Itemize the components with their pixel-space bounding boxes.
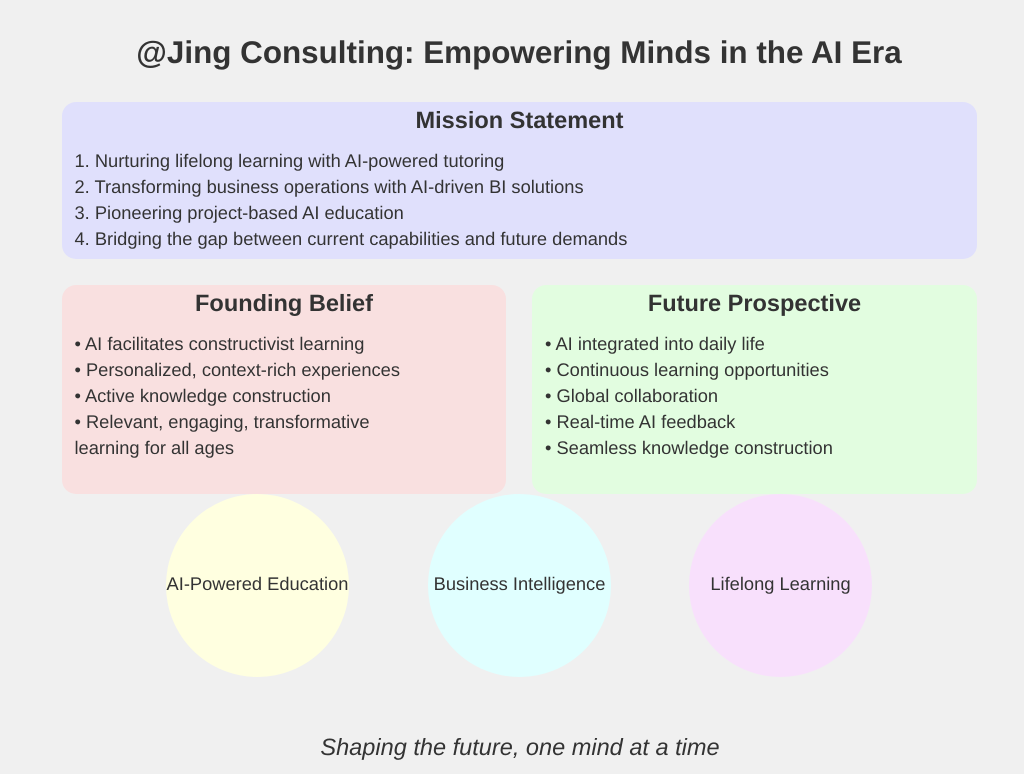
text: future prospective list: • AI integrated into daily life — [545, 333, 765, 354]
text: founding belief list: learning for all ages — [74, 437, 234, 458]
circle: business intelligence: Business Intelligence — [434, 573, 605, 594]
text: mission list: 4. Bridging the gap between current capabilities and future demands — [74, 228, 627, 249]
heading: future prospective: Future Prospective — [648, 290, 861, 316]
panel: founding belief — [62, 285, 506, 494]
heading: mission statement: Mission Statement — [415, 107, 624, 133]
text: founding belief list: • Personalized, context-rich experiences — [74, 359, 400, 380]
title: @Jing Consulting: Empowering Minds in the AI Era — [136, 35, 902, 70]
panel: future prospective — [532, 285, 977, 494]
circle: lifelong learning: Lifelong Learning — [710, 573, 851, 594]
text: mission list — [74, 150, 627, 249]
text: mission list: 2. Transforming business operations with AI-driven BI solutions — [74, 176, 584, 197]
text: future prospective list: • Real-time AI feedback — [545, 411, 735, 432]
text: founding belief list: • Relevant, engaging, transformative — [74, 411, 370, 432]
circle: lifelong learning — [689, 494, 872, 677]
text: mission list: 1. Nurturing lifelong learning with AI-powered tutoring — [74, 150, 504, 171]
text: future prospective list — [545, 333, 833, 458]
text: founding belief list — [74, 333, 400, 458]
heading: founding belief: Founding Belief — [195, 290, 373, 316]
text: future prospective list: • Seamless knowledge construction — [545, 437, 833, 458]
text: founding belief list: • Active knowledge construction — [74, 385, 331, 406]
panel: mission statement — [62, 102, 977, 259]
text: future prospective list: • Global collaboration — [545, 385, 718, 406]
circle: AI-powered education: AI-Powered Education — [167, 573, 348, 594]
circle: business intelligence — [428, 494, 611, 677]
text: mission list: 3. Pioneering project-based AI education — [74, 202, 404, 223]
tagline: Shaping the future, one mind at a time — [320, 734, 720, 760]
text: founding belief list: • AI facilitates constructivist learning — [74, 333, 364, 354]
text: future prospective list: • Continuous learning opportunities — [545, 359, 829, 380]
circle: AI-powered education — [166, 494, 349, 677]
